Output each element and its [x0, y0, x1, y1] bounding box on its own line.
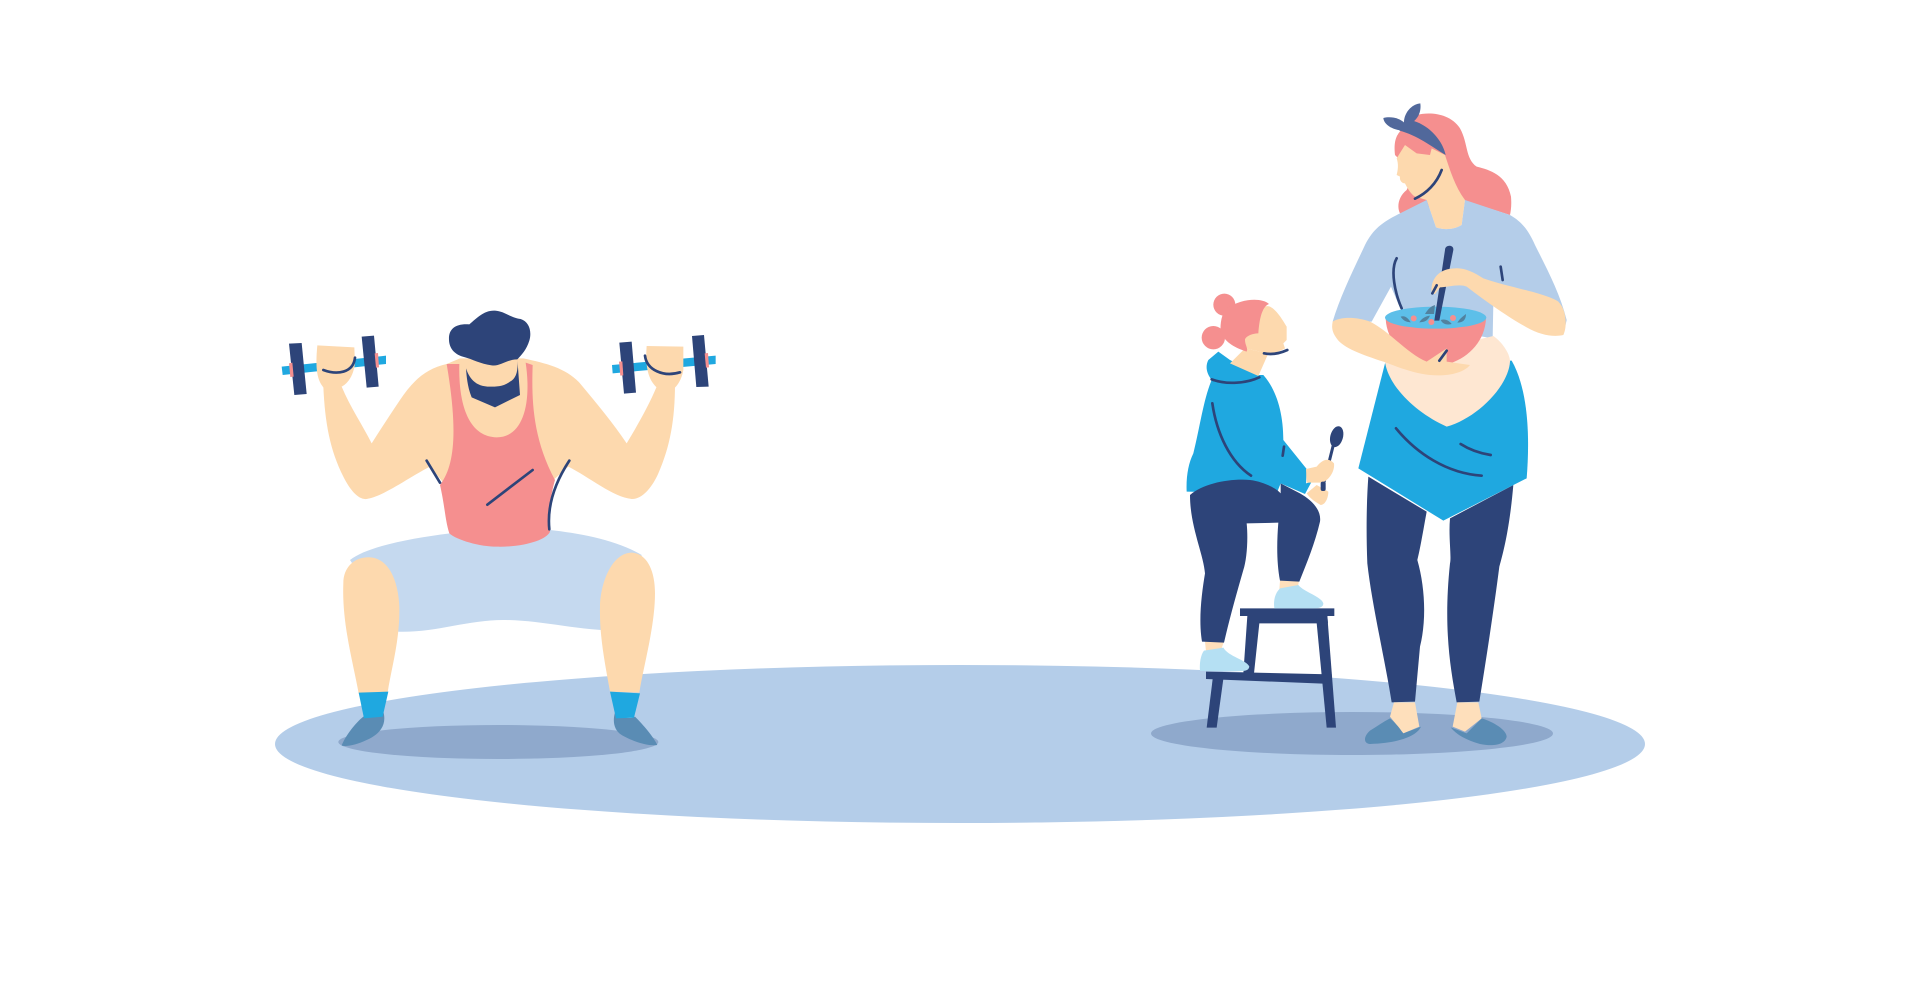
woman left foot [1390, 702, 1419, 733]
headband [1383, 103, 1446, 155]
child neck [1230, 348, 1268, 376]
woman face and neck [1397, 145, 1465, 229]
muscle lines [323, 356, 680, 529]
left shoe [342, 712, 384, 746]
child hair with buns [1202, 294, 1269, 352]
right fist [646, 346, 683, 389]
right shoe [614, 713, 657, 745]
woman left slipper [1365, 718, 1421, 744]
woman left leg [1367, 477, 1427, 702]
left sock [359, 692, 388, 718]
woman right foot [1453, 702, 1482, 732]
apron folds [1396, 428, 1491, 476]
shorts [350, 530, 642, 632]
woman right leg [1447, 485, 1513, 702]
man shadow [338, 725, 658, 759]
ground ellipse [275, 665, 1645, 823]
child upper shoe [1274, 585, 1323, 608]
right dumbbell [612, 335, 716, 394]
child trousers [1190, 480, 1328, 643]
woman right slipper [1451, 718, 1507, 745]
right sock [610, 692, 640, 718]
left fist [316, 345, 355, 387]
left dumbbell [282, 336, 386, 395]
child lines [1212, 350, 1287, 476]
child face [1245, 306, 1287, 353]
child hand [1306, 460, 1334, 483]
tank top [440, 363, 555, 547]
woman shirt [1333, 200, 1567, 338]
child ankles [1205, 581, 1299, 653]
hair [449, 311, 530, 365]
shirt lines [1394, 258, 1503, 308]
beard [466, 358, 520, 407]
apron bib [1385, 336, 1510, 427]
lower bodies: stool and legs [1200, 477, 1513, 745]
mixing spoon [1434, 246, 1453, 321]
apron [1358, 361, 1528, 521]
torso and arms [323, 358, 675, 499]
shadow under woman and child [1151, 712, 1553, 755]
upper bodies: woman and child [1187, 103, 1567, 521]
woman right arm [1431, 268, 1566, 336]
child hoodie [1187, 352, 1312, 494]
bowl [1385, 305, 1486, 363]
jaw line [1415, 170, 1442, 199]
child spoon [1322, 425, 1346, 492]
finger lines [1432, 285, 1447, 361]
child knee hand [1307, 485, 1328, 505]
step stool [1206, 608, 1336, 728]
figure: man doing squat with dumbbells [282, 311, 716, 759]
spoon handle lower [1321, 482, 1326, 491]
trousers shape [1190, 480, 1320, 643]
woman left arm [1332, 318, 1470, 375]
left leg [343, 557, 399, 693]
woman hair [1395, 114, 1511, 215]
child lower shoe [1200, 648, 1249, 671]
right leg [600, 553, 655, 693]
